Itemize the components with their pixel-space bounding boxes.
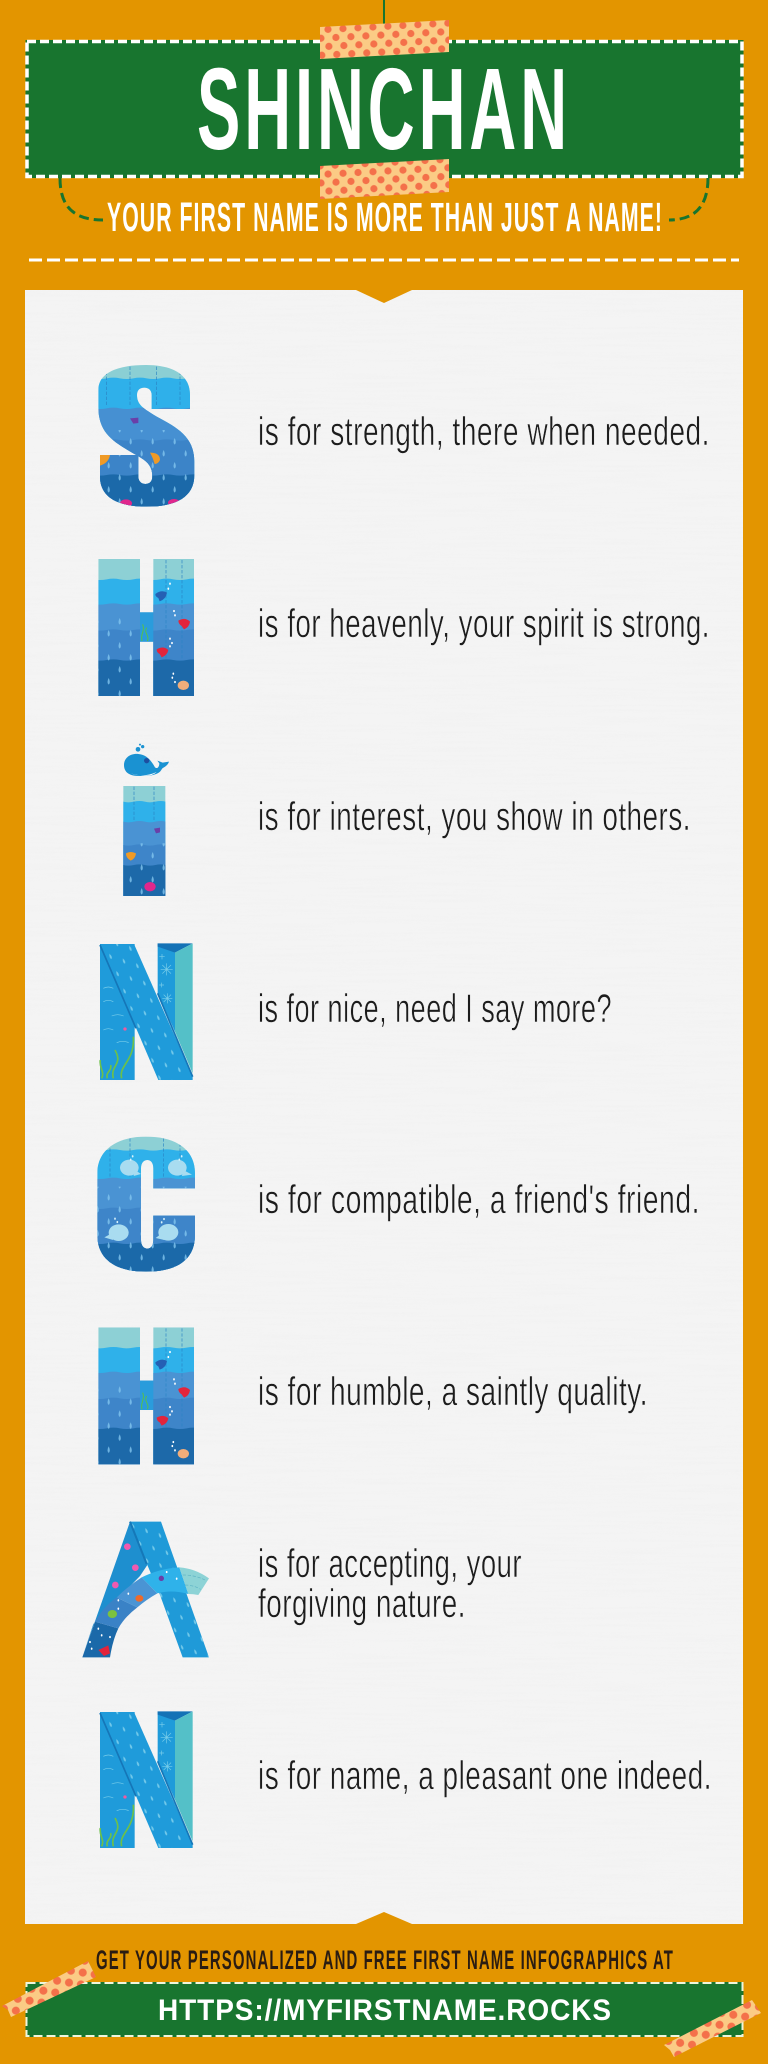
letter S	[98, 365, 194, 507]
letter H	[98, 559, 194, 696]
icon: whale	[124, 744, 169, 776]
footer url: HTTPS://MYFIRSTNAME.ROCKS	[158, 1994, 612, 2027]
tape: footer left	[2, 1961, 96, 2017]
bracket: right	[669, 178, 708, 220]
letter N	[100, 943, 193, 1080]
header banner	[26, 40, 744, 178]
tape: below title	[320, 159, 449, 199]
text: A: forgiving nature.	[258, 1582, 466, 1626]
text: A: is for accepting, your	[258, 1542, 522, 1586]
letter A	[82, 1522, 209, 1657]
hanging string	[383, 0, 385, 24]
tape: footer right	[664, 2000, 761, 2057]
letter N (second)	[100, 1711, 193, 1848]
bracket: left	[60, 178, 103, 220]
text: A	[258, 1542, 522, 1626]
letter H (second)	[98, 1328, 194, 1464]
paper panel	[25, 290, 743, 1924]
letter C	[97, 1136, 195, 1272]
footer banner	[26, 1982, 744, 2037]
tape: top	[320, 20, 449, 59]
letter I	[123, 744, 169, 896]
text: N: is for nice, need I say more?	[258, 987, 612, 1031]
